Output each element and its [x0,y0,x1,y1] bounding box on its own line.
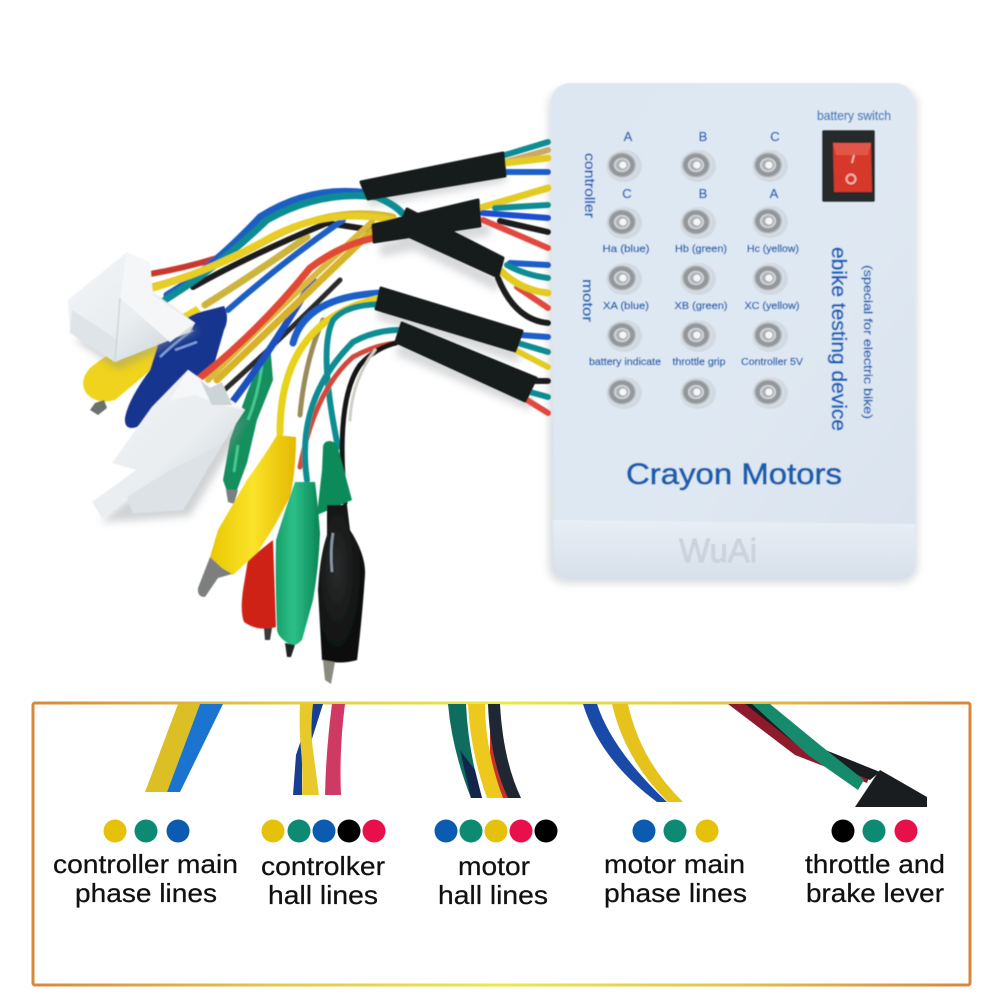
alligator clip: green rear [223,343,273,504]
rotated label: special for electric bike: (special for electric bike) [861,265,875,419]
wire bundle: connector one to tubes [150,191,402,310]
connector: white plug two [92,370,245,518]
caption: motor hall lines: motor [458,851,530,881]
alligator clip: red [242,540,276,640]
colour dots: motor hall [434,820,558,842]
rotated label: controller: controller [582,153,598,218]
wires from tubes to device: fourth bundle [515,335,548,367]
LED labels: XC (yellow) [744,301,800,312]
alligator clip: green middle rear [317,441,352,515]
colour dots: throttle and brake [832,820,918,842]
product photo [68,83,918,684]
caption: controller main phase lines: controller main [53,849,238,879]
LED labels: C [770,129,780,144]
wire bundle: connector two to tubes [200,222,374,405]
LED labels: Ha (blue) [602,244,650,255]
wires shadows [368,175,532,404]
caption: controlker hall lines [261,851,385,910]
alligator clip: black [318,505,365,684]
caption: throttle and brake lever: brake lever [806,878,944,908]
LED labels: A [770,186,779,201]
LED labels: B [699,129,707,144]
LED labels: XA (blue) [603,301,649,312]
connector: white plug one [68,252,195,362]
LED labels: XB (green) [674,301,728,312]
caption: motor hall lines: hall lines [438,880,548,910]
panel: testing device body [551,83,916,580]
LED labels: battery indicate [589,357,661,368]
caption: controller main phase lines [53,849,238,908]
caption: throttle and brake lever: throttle and [805,849,945,879]
LED labels: A [624,129,633,144]
LED indicator grid [606,150,788,409]
LED labels: Hc (yellow) [747,244,799,255]
connector shadows [75,300,250,522]
wires from tubes to device: top bundle [505,142,548,172]
LED labels: Controller 5V [741,357,803,368]
heat shrink tubes [361,153,536,401]
colour dots: motor main phase [632,820,718,842]
panel frame [33,703,970,985]
wire photo: motor main phase [583,704,683,802]
device lower bevel [553,520,916,580]
LED labels: C [622,186,632,201]
wire bundle: motor main wires left [280,293,380,447]
colour dots: controller hall [262,820,386,842]
device shadow [548,88,918,584]
caption: controlker hall lines: hall lines [268,880,378,910]
rotated label: motor: motor [580,279,596,322]
wires from tubes to device: fifth bundle [527,381,548,413]
wire photo: controller hall [293,704,345,795]
alligator clip: yellow rear [83,306,215,415]
wire photo: motor hall [448,704,521,798]
LED labels: throttle grip [672,357,726,368]
caption: motor main phase lines: phase lines [604,878,747,908]
rotated label: ebike testing device: ebike testing device [827,247,849,431]
caption: motor main phase lines: motor main [604,849,745,879]
alligator clip: yellow front [198,435,296,597]
wire photo: controller main phase [145,704,223,792]
caption: controlker hall lines: controlker [261,851,385,881]
caption: controller main phase lines: phase lines [75,878,217,908]
device brand mark: WuAi [679,532,757,569]
LED labels: B [699,186,707,201]
LED labels: Hb (green) [675,244,727,255]
caption: motor main phase lines [604,849,747,908]
LED labels [589,129,803,368]
caption: motor hall lines [438,851,548,910]
brand name: Crayon Motors: Crayon Motors [626,458,842,491]
wires from tubes to device: third bundle [498,263,548,323]
alligator clip: green front [276,482,320,657]
colour dots: controller main phase [104,820,190,842]
wire photo: throttle and brake [728,704,927,807]
wire bundle: hall wires left [300,330,400,503]
battery switch label: battery switch [817,109,891,123]
alligator clip: blue [125,306,227,428]
icon: battery rocker switch [822,130,875,202]
panel: wire colour legend [33,703,970,985]
caption: throttle and brake lever [805,849,945,908]
wires from tubes to device: second bundle [480,188,548,248]
